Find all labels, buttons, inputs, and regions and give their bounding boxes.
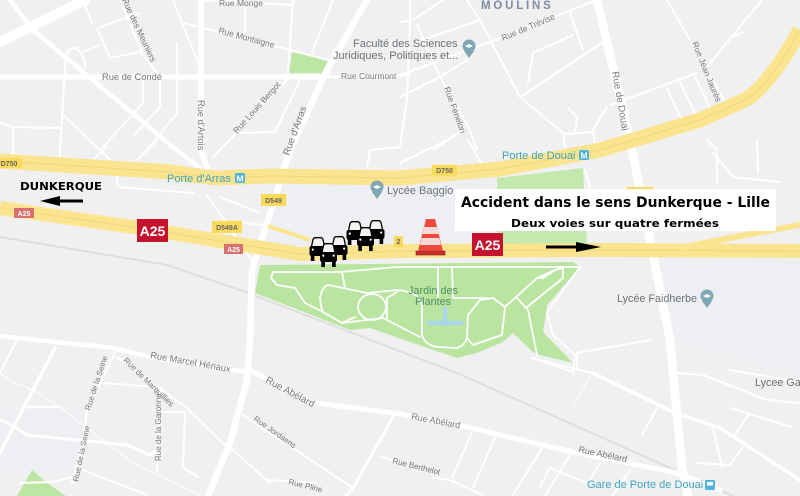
shield: D750 centre: D750	[436, 168, 453, 175]
street labels: Rue d'Arras	[281, 105, 309, 157]
street labels: Rue Pline	[288, 477, 324, 494]
park: near Porte de Douai	[497, 168, 587, 245]
metro label: Porte d'Arras: M	[236, 174, 244, 184]
callout subtitle: Deux voies sur quatre fermées	[511, 217, 719, 230]
motorways	[0, 30, 800, 254]
street: Rue Courmont	[320, 75, 410, 77]
street: Rue de Douai	[597, 0, 688, 496]
street labels: Rue Abélard	[578, 444, 628, 464]
street: diagonal	[10, 0, 200, 168]
shield: A25 left: A25	[18, 211, 31, 218]
metro label: Porte d'Arras: Porte d'Arras	[167, 173, 231, 185]
park label: Jardin des Plantes: Jardin des	[408, 285, 459, 297]
street labels: Rue Jean Jaurès	[690, 40, 723, 103]
shield: D750 left	[0, 158, 22, 168]
callout title: Accident dans le sens Dunkerque - Lille	[461, 195, 770, 211]
park: bottom left	[17, 470, 66, 496]
place label: Faculté: Faculté des Sciences	[353, 38, 458, 50]
park: Jardin des Plantes	[255, 262, 580, 363]
callout: accident	[455, 189, 776, 231]
shield: 2	[394, 236, 403, 247]
park footpaths	[271, 267, 580, 375]
district label: Moulins: MOULINS	[481, 0, 554, 12]
place label: Lycee Ga: Lycee Ga	[755, 377, 800, 389]
park: Faculté square	[289, 52, 328, 73]
metro label: Porte de Douai: Porte de Douai	[502, 150, 575, 162]
street: Rue d'Arras	[208, 0, 367, 496]
street labels: Rue Louis Bergot	[231, 79, 283, 135]
street labels: Rue de la Seine	[83, 354, 110, 412]
street labels: Rue Abélard	[411, 411, 461, 430]
street labels: Rue de la Garonne	[154, 393, 163, 461]
street: Rue Marcel Hénaux	[0, 336, 247, 372]
street labels: Rue Jordaens	[252, 414, 298, 450]
heading: Dunkerque: DUNKERQUE	[20, 180, 102, 193]
street: south-east avenue	[593, 373, 800, 480]
A25 red badge right: A25	[475, 237, 501, 253]
icon: Faculté pin	[462, 40, 476, 58]
park label: Jardin des Plantes: Plantes	[415, 296, 452, 308]
shield: 2: 2	[397, 239, 401, 246]
place label: Faculté: Juridiques, Politiques et...	[333, 50, 458, 62]
street labels: Rue Abélard	[264, 375, 316, 410]
shield: A25 centre: A25	[227, 247, 240, 254]
shield: behind callout	[627, 187, 653, 191]
street labels: Rue Montaigne	[217, 25, 276, 50]
street: Rue de Condé	[0, 74, 320, 80]
A25 red badge right	[472, 233, 503, 256]
street: Rue Abélard	[250, 370, 720, 490]
shield: D549A: D549A	[216, 225, 238, 232]
A25 red badge left	[137, 219, 168, 242]
icon: Lycée Baggio pin	[370, 180, 384, 199]
building areas	[0, 178, 800, 474]
pond	[426, 307, 464, 327]
street labels: Rue de Trévise	[500, 11, 557, 43]
street: top-left boulevard	[0, 0, 85, 42]
motorway: D750	[0, 30, 800, 178]
street labels: Rue de la Seine	[71, 424, 92, 482]
shield: D549: D549	[265, 198, 282, 205]
station label: Gare de Porte de Douai: Gare de Porte de Douai	[587, 479, 703, 491]
place label: Faculté	[333, 38, 458, 62]
arrow: towards Lille	[546, 242, 601, 252]
parks	[17, 52, 587, 496]
road shields	[0, 158, 653, 254]
shield: A25 left	[14, 208, 34, 218]
shield: D549A	[212, 221, 242, 233]
street labels: Rue Berthelot	[392, 456, 442, 477]
metro label: Porte de Douai: M	[580, 150, 588, 160]
park label: Jardin des Plantes	[408, 285, 459, 308]
icon: traffic jam cars	[310, 221, 384, 267]
street labels: Rue Courmont	[341, 71, 397, 81]
street labels: Rue Fénelon	[442, 85, 468, 135]
arrow: towards Dunkerque	[40, 196, 83, 206]
A25 red badge left: A25	[140, 223, 166, 239]
street labels: Rue de Condé	[102, 72, 162, 82]
place label: Lycée Faidherbe: Lycée Faidherbe	[617, 293, 697, 305]
street labels: Rue Marcel Hénaux	[150, 350, 232, 374]
icon: traffic cone	[416, 219, 445, 255]
icon: Lycée Faidherbe pin	[700, 290, 714, 308]
motorway: A25	[0, 208, 800, 254]
shield: D750 left: D750	[1, 161, 17, 168]
street labels: Rue d'Artois	[196, 100, 206, 151]
place label: Lycée Baggio: Lycée Baggio	[387, 185, 453, 197]
street labels: Rue de Douai	[609, 71, 630, 132]
street labels: Rue de Marquillies	[122, 356, 176, 408]
shield: D549	[261, 194, 286, 206]
motorway: slip road	[268, 226, 310, 240]
shield: D750 centre	[432, 165, 457, 176]
street: Rue d'Artois	[201, 0, 207, 168]
railway line	[0, 237, 733, 496]
shield: A25 centre	[224, 244, 243, 254]
